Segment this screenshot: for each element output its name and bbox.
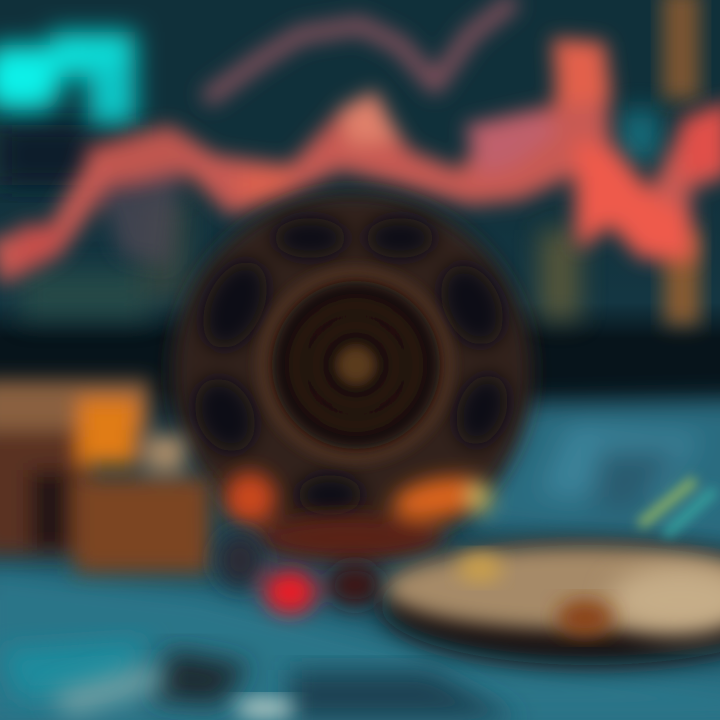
plate right bbox=[380, 545, 720, 665]
coin spoke openings bbox=[184, 218, 517, 515]
coin lower glow bbox=[224, 470, 492, 560]
chart: faint pink upper line bbox=[205, 0, 515, 100]
rainbow streak bbox=[640, 480, 715, 535]
icon: cyan chart glow bbox=[0, 32, 136, 125]
chart: vertical bronze candle bbox=[662, 0, 700, 325]
table surface: upper right teal bbox=[470, 400, 720, 550]
table surface: lower teal bbox=[0, 565, 720, 720]
chart: red line bbox=[0, 38, 720, 285]
red accent bbox=[216, 532, 383, 614]
chart: dark candles bbox=[20, 110, 660, 320]
coin rim bbox=[172, 192, 532, 552]
coin: wheel with spokes bbox=[172, 192, 532, 560]
coin center bbox=[272, 281, 440, 449]
coin inner ring bbox=[257, 267, 453, 463]
gold stack left bbox=[0, 380, 210, 573]
